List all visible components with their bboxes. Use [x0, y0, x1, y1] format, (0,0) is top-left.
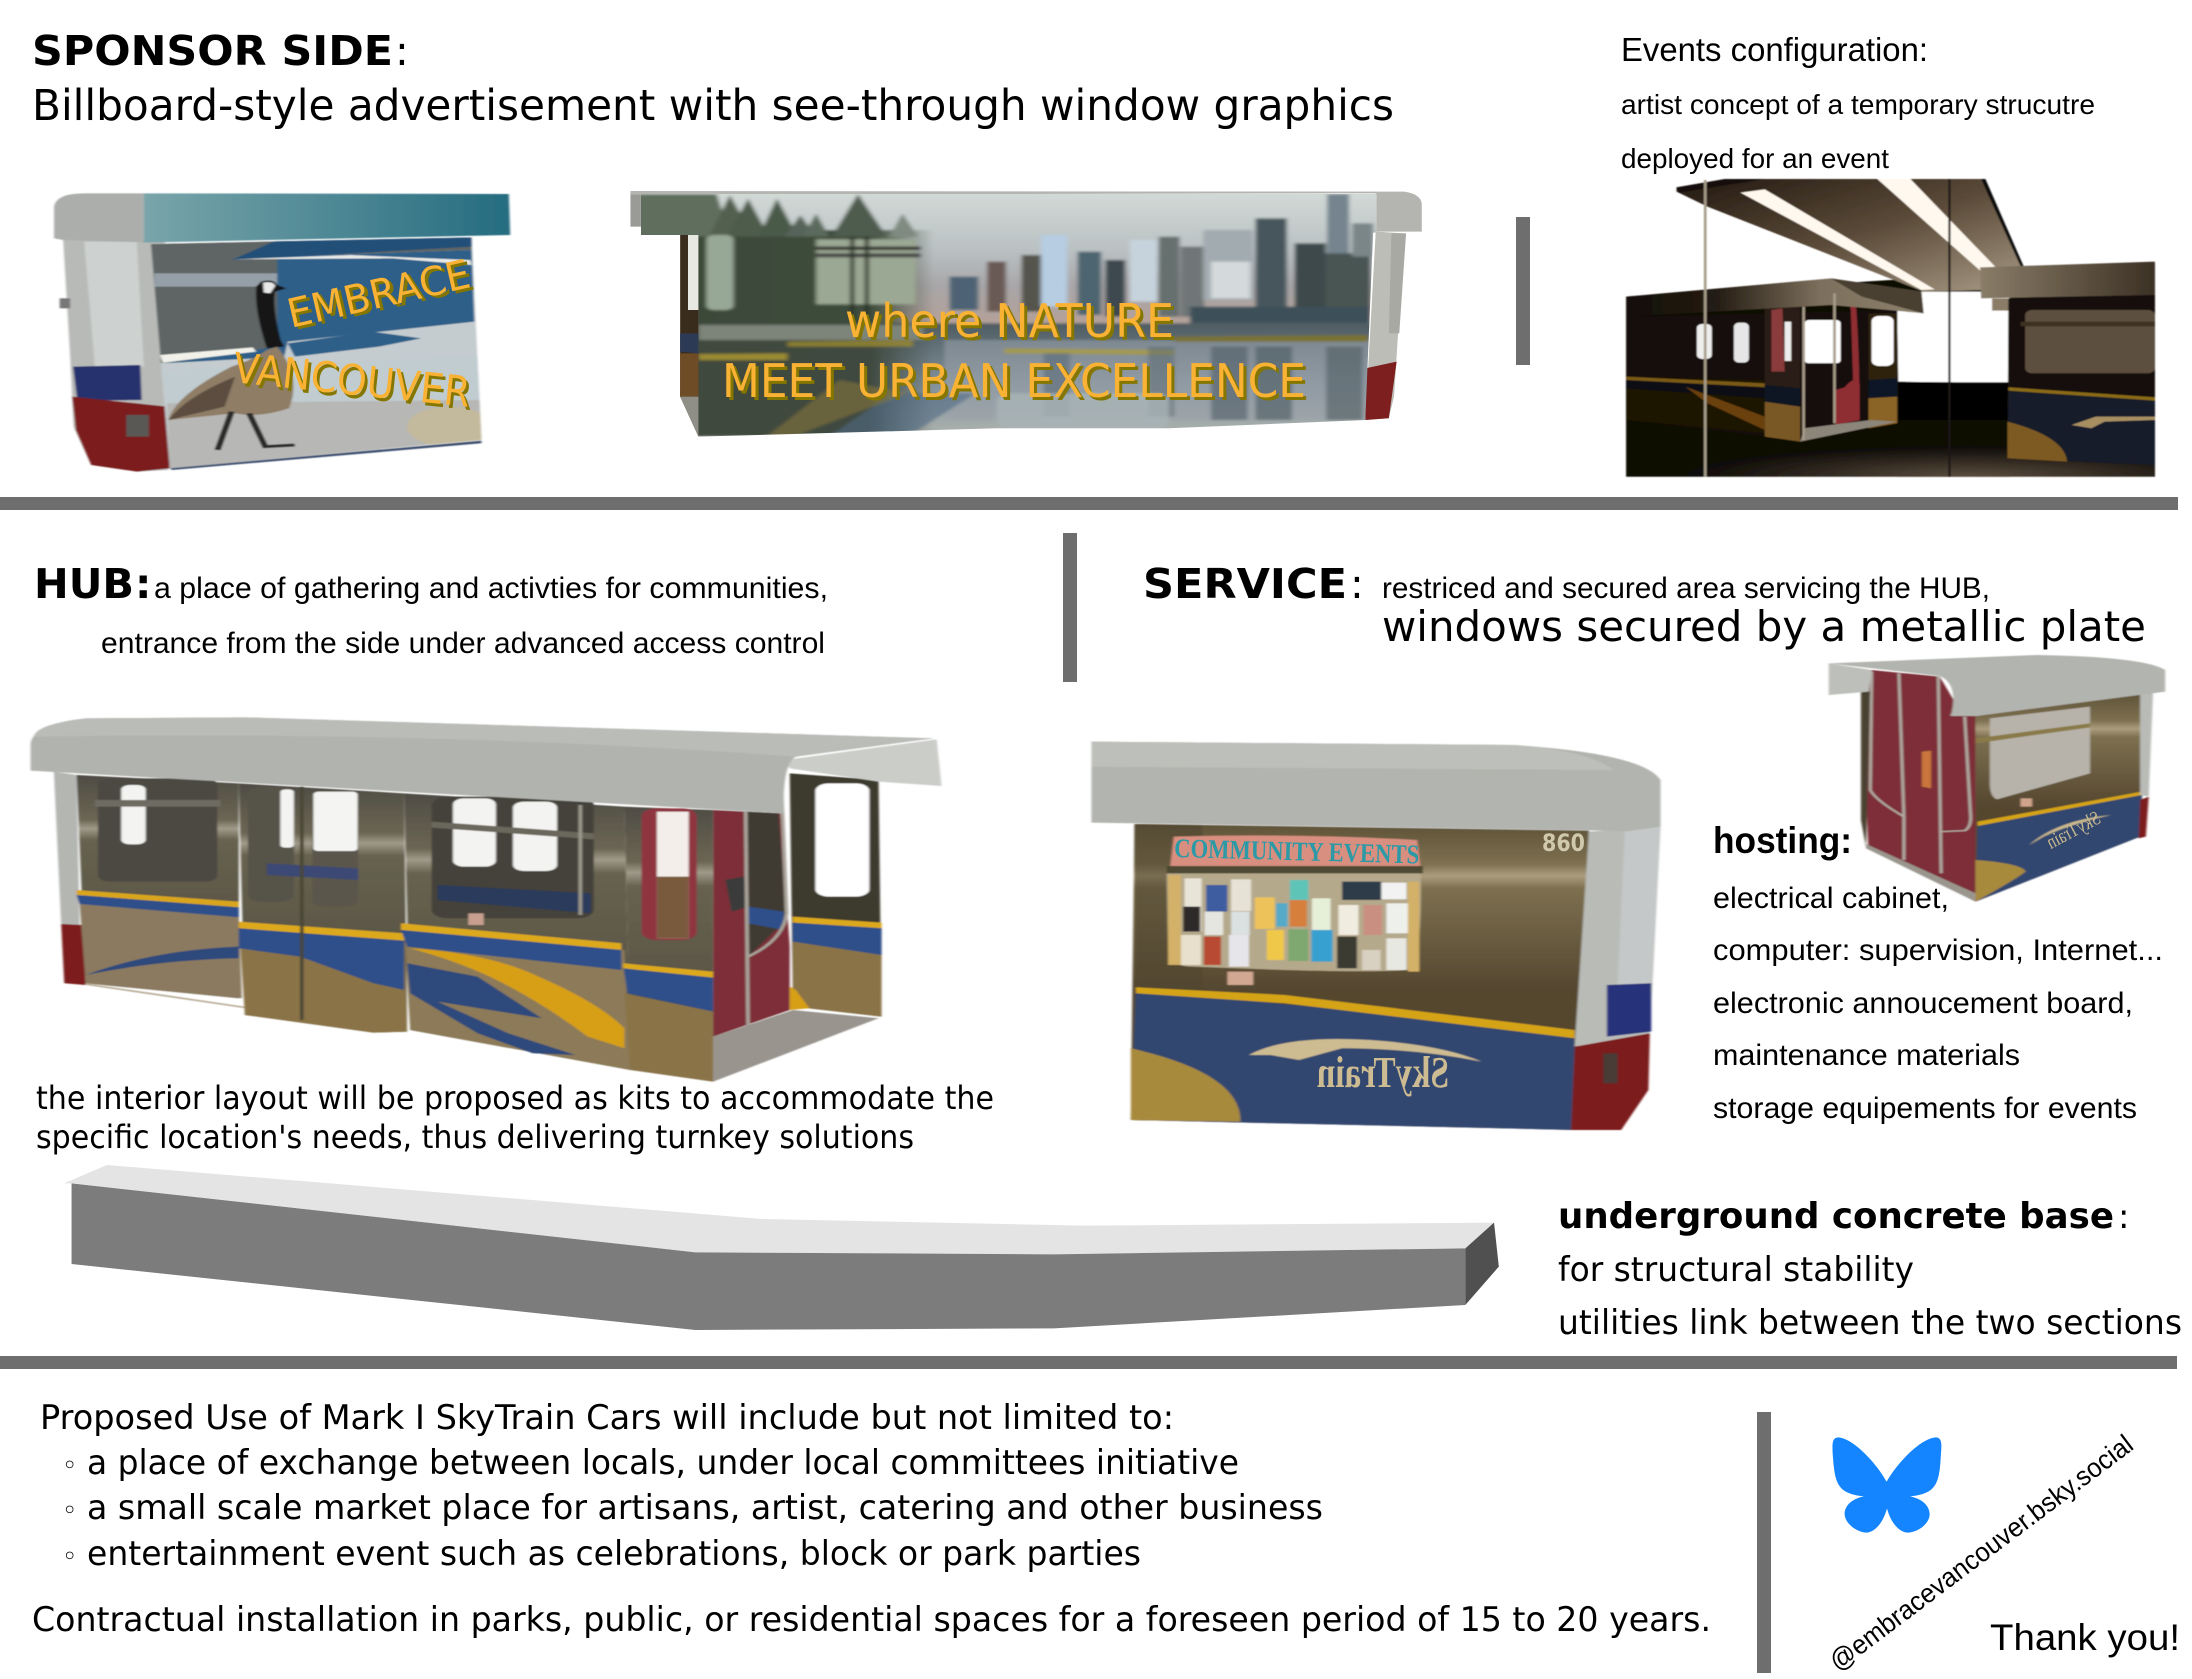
text: VANCOUVER on car: VANCOUVER — [231, 343, 473, 417]
text: where NATURE: where NATURE — [845, 294, 1174, 348]
illustration: hub car — [31, 717, 942, 1082]
text: interior layout note: specific location's needs, thus delivering turnkey solutions — [36, 1118, 914, 1156]
illustration: event temporary structure render — [1626, 179, 2155, 477]
text: events configuration: deployed for an event — [1621, 143, 1889, 174]
heading: HUB description: a place of gathering and activties for communities, — [154, 572, 828, 605]
text: MEET URBAN EXCELLENCE: MEET URBAN EXCELLENCE — [725, 357, 1309, 411]
text: proposed uses: Contractual installation in parks, public, or residential spaces for a foreseen period of 15 to 20 years. — [32, 1600, 1711, 1640]
heading: sponsor side: : — [395, 27, 409, 75]
text: mirrored SkyTrain logo small: SkyTrain — [2043, 807, 2104, 854]
text: underground concrete base: : — [2118, 1197, 2129, 1237]
text: events configuration: Events configuration: — [1621, 31, 1928, 68]
text: proposed uses: a small scale market place for artisans, artist, catering and other business — [87, 1488, 1323, 1528]
text: proposed uses: Proposed Use of Mark I SkyTrain Cars will include but not limited to: — [40, 1398, 1174, 1438]
heading: SERVICE description: SERVICE — [1143, 560, 1347, 608]
text: hosting list: electronic annoucement board, — [1713, 987, 2133, 1020]
text: EMBRACE on car: EMBRACE — [283, 252, 475, 338]
heading: SERVICE description: restriced and secured area servicing the HUB, — [1382, 572, 1990, 605]
heading: sponsor side: Billboard-style advertisement with see-through window graphics — [32, 81, 1394, 131]
text: community events sign: COMMUNITY EVENTS — [1174, 833, 1420, 869]
illustration: underground concrete base — [64, 1165, 1499, 1330]
text: hosting list: computer: supervision, Internet... — [1713, 934, 2163, 967]
heading: HUB description: HUB — [34, 560, 134, 608]
text: proposed uses — [32, 1398, 1711, 1640]
illustration: service car front — [1091, 742, 1661, 1130]
text: interior layout note — [36, 1079, 994, 1156]
text: mirrored SkyTrain logo: SkyTrain — [1317, 1048, 1449, 1097]
text: hosting list: electrical cabinet, — [1713, 882, 1949, 915]
text: MEET URBAN EXCELLENCE: MEET URBAN EXCELLENCE — [722, 354, 1306, 408]
text: EMBRACE on car: EMBRACE — [287, 254, 478, 340]
text: events configuration — [1621, 31, 2095, 174]
divider: top horizontal bar — [0, 497, 2178, 510]
heading: SERVICE description: windows secured by a metallic plate — [1382, 602, 2146, 651]
divider: middle horizontal bar — [0, 1356, 2177, 1369]
heading: SERVICE description — [1143, 560, 2146, 651]
text: hosting list: maintenance materials — [1713, 1039, 2020, 1072]
text: underground concrete base: for structural stability — [1558, 1250, 1914, 1290]
text: where NATURE: where NATURE — [848, 297, 1177, 351]
heading: sponsor side — [32, 27, 1394, 131]
icon: bluesky butterfly — [1832, 1437, 1941, 1533]
heading: HUB description: : — [135, 560, 151, 608]
text: hosting list: hosting: — [1713, 820, 1852, 861]
text: underground concrete base — [1558, 1196, 2182, 1343]
divider: events vertical bar — [1516, 217, 1530, 365]
heading: sponsor side: SPONSOR SIDE — [32, 27, 393, 75]
heading: HUB description — [34, 560, 828, 660]
divider: hub and service vertical bar — [1063, 533, 1077, 682]
text: car number: 860 — [1542, 829, 1585, 857]
divider: footer vertical bar — [1757, 1412, 1771, 1673]
illustration: sponsor side long car with Vancouver skyline — [620, 190, 1422, 437]
text: underground concrete base: underground concrete base — [1558, 1196, 2114, 1237]
text: proposed uses: ◦ — [62, 1451, 77, 1481]
text: hosting list — [1713, 820, 2163, 1125]
text: proposed uses: entertainment event such as celebrations, block or park parties — [87, 1534, 1141, 1574]
text: proposed uses: ◦ — [62, 1496, 77, 1526]
illustration: service car rear — [1829, 655, 2165, 902]
heading: SERVICE description: : — [1350, 560, 1364, 608]
text: bluesky handle: @embracevancouver.bsky.social — [1824, 1429, 2139, 1677]
text: thank you: Thank you! — [1990, 1617, 2180, 1658]
illustration: sponsor side end car with goose — [54, 193, 510, 472]
text: interior layout note: the interior layout will be proposed as kits to accommodate the — [36, 1079, 994, 1117]
text: proposed uses: ◦ — [62, 1542, 77, 1572]
text: events configuration: artist concept of a temporary strucutre — [1621, 89, 2095, 120]
text: proposed uses: a place of exchange between locals, under local committees initiative — [87, 1443, 1239, 1483]
text: hosting list: storage equipements for events — [1713, 1092, 2137, 1125]
text: VANCOUVER on car: VANCOUVER — [234, 347, 475, 420]
text: underground concrete base: utilities link between the two sections — [1558, 1303, 2182, 1343]
heading: HUB description: entrance from the side under advanced access control — [101, 627, 825, 660]
